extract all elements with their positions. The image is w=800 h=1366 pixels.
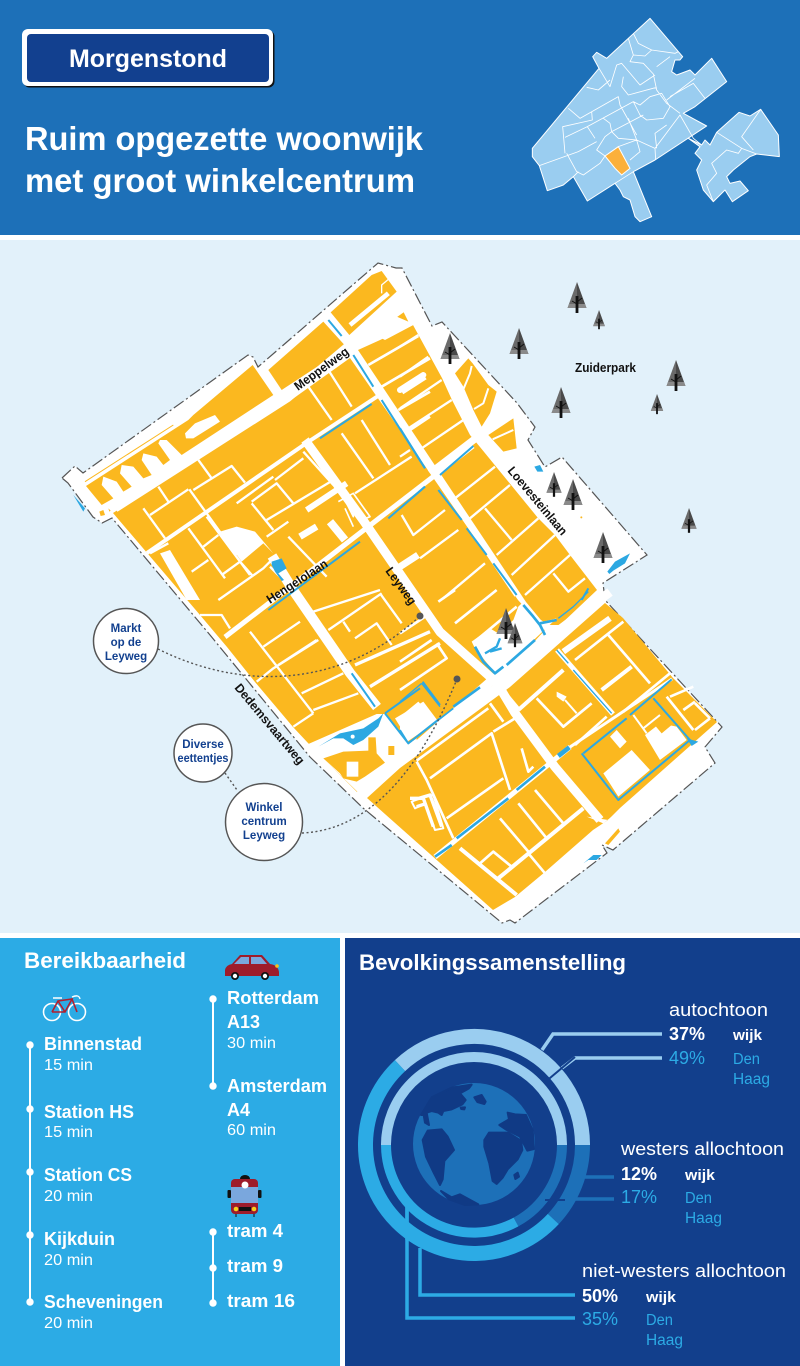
road labels: Meppelweg bbox=[292, 344, 352, 393]
road labels: Zuiderpark bbox=[575, 361, 636, 375]
timeline: cycling: Station CS bbox=[44, 1165, 132, 1185]
legend: niet-westers allochtoon: Den bbox=[646, 1312, 673, 1329]
neighbourhood name badge bbox=[22, 29, 274, 88]
legend: autochtoon: 49% bbox=[669, 1048, 705, 1068]
callout: Diverse eettentjes: Diverse bbox=[182, 739, 224, 751]
locator map of The Hague bbox=[532, 18, 779, 222]
legend: westers allochtoon bbox=[620, 1139, 784, 1227]
timeline: cycling: 15 min bbox=[44, 1057, 93, 1074]
callout: Markt op de Leyweg: Markt bbox=[111, 623, 142, 635]
callout: Markt op de Leyweg: Leyweg bbox=[105, 651, 147, 663]
road labels: Dedemsvaartweg bbox=[232, 681, 307, 767]
timeline: cycling: Kijkduin bbox=[44, 1229, 115, 1249]
panel: Bereikbaarheid bbox=[0, 938, 340, 1366]
timeline: cycling: 20 min bbox=[44, 1315, 93, 1332]
icon: tram bbox=[228, 1175, 262, 1217]
leader lines bbox=[407, 1034, 662, 1318]
timeline: cycling: 20 min bbox=[44, 1188, 93, 1205]
legend: niet-westers allochtoon: Haag bbox=[646, 1332, 683, 1349]
legend: niet-westers allochtoon: 35% bbox=[582, 1309, 618, 1329]
heading: Bereikbaarheid bbox=[24, 948, 186, 973]
dotted leader lines bbox=[158, 616, 457, 833]
legend: autochtoon bbox=[669, 1000, 770, 1088]
heading: Bevolkingssamenstelling bbox=[359, 950, 626, 975]
title: met groot winkelcentrum bbox=[25, 162, 415, 199]
callout: Markt op de Leyweg: op de bbox=[111, 637, 141, 649]
timeline: car routes: Rotterdam bbox=[227, 988, 319, 1008]
timeline: car routes: A4 bbox=[227, 1100, 250, 1120]
timeline: tram lines: tram 4 bbox=[227, 1221, 283, 1241]
timeline: car routes: Amsterdam bbox=[227, 1076, 327, 1096]
road labels: Hengelolaan bbox=[264, 557, 330, 607]
timeline: car routes: A13 bbox=[227, 1012, 260, 1032]
callout: Diverse eettentjes: eettentjes bbox=[178, 753, 228, 765]
title: Ruim opgezette woonwijk bbox=[25, 120, 424, 157]
timeline: tram lines bbox=[209, 1221, 295, 1311]
legend: autochtoon: 37% bbox=[669, 1024, 705, 1044]
callout: Winkelcentrum Leyweg: Leyweg bbox=[243, 830, 285, 842]
legend: niet-westers allochtoon bbox=[582, 1261, 786, 1349]
timeline: tram lines: tram 9 bbox=[227, 1256, 283, 1276]
road labels bbox=[232, 344, 636, 767]
timeline: cycling: 20 min bbox=[44, 1252, 93, 1269]
legend: westers allochtoon: westers allochtoon bbox=[620, 1139, 784, 1159]
legend: niet-westers allochtoon: 50% bbox=[582, 1286, 618, 1306]
building blocks bbox=[85, 271, 717, 910]
legend: autochtoon: autochtoon bbox=[669, 1000, 768, 1020]
icon: car bbox=[225, 955, 279, 980]
road labels: Loevesteinlaan bbox=[505, 464, 570, 538]
legend: autochtoon: Den bbox=[733, 1051, 760, 1068]
donut chart: wijk (outer) and Den Haag (inner) bbox=[365, 1036, 582, 1253]
legend: autochtoon: Haag bbox=[733, 1071, 770, 1088]
streets bbox=[115, 279, 710, 895]
callout: Winkelcentrum Leyweg bbox=[226, 784, 302, 860]
timeline: car routes bbox=[209, 988, 327, 1139]
legend: niet-westers allochtoon: niet-westers allochtoon bbox=[582, 1261, 786, 1281]
legend: westers allochtoon: wijk bbox=[684, 1167, 716, 1184]
callout: Markt op de Leyweg bbox=[94, 608, 158, 674]
timeline: car routes: 60 min bbox=[227, 1122, 276, 1139]
legend: westers allochtoon: 12% bbox=[621, 1164, 657, 1184]
callout: Winkelcentrum Leyweg: Winkel bbox=[246, 802, 282, 814]
road labels: Leyweg bbox=[383, 565, 419, 608]
legend: autochtoon: wijk bbox=[732, 1027, 763, 1044]
timeline: cycling: Binnenstad bbox=[44, 1034, 142, 1054]
legend: niet-westers allochtoon: wijk bbox=[645, 1289, 677, 1306]
icon: globe bbox=[413, 1083, 535, 1205]
district outline bbox=[62, 263, 722, 923]
legend: westers allochtoon: 17% bbox=[621, 1187, 657, 1207]
header band bbox=[0, 0, 800, 235]
legend: westers allochtoon: Haag bbox=[685, 1210, 722, 1227]
legend: westers allochtoon: Den bbox=[685, 1190, 712, 1207]
timeline: car routes: 30 min bbox=[227, 1035, 276, 1052]
title bbox=[25, 120, 424, 199]
timeline: cycling: Scheveningen bbox=[44, 1292, 163, 1312]
neighbourhood name badge: Morgenstond bbox=[69, 45, 227, 73]
panel: Bevolkingssamenstelling bbox=[345, 938, 800, 1366]
timeline: tram lines: tram 16 bbox=[227, 1291, 295, 1311]
timeline: cycling: Station HS bbox=[44, 1102, 134, 1122]
callout: Winkelcentrum Leyweg: centrum bbox=[241, 816, 287, 828]
panel: district map bbox=[0, 240, 800, 933]
canals and water bbox=[73, 320, 698, 863]
trees: Zuiderpark bbox=[440, 282, 697, 647]
timeline: cycling: 15 min bbox=[44, 1124, 93, 1141]
callout: Diverse eettentjes bbox=[174, 724, 232, 782]
icon: bicycle bbox=[44, 996, 86, 1020]
timeline: cycling bbox=[26, 1034, 163, 1332]
